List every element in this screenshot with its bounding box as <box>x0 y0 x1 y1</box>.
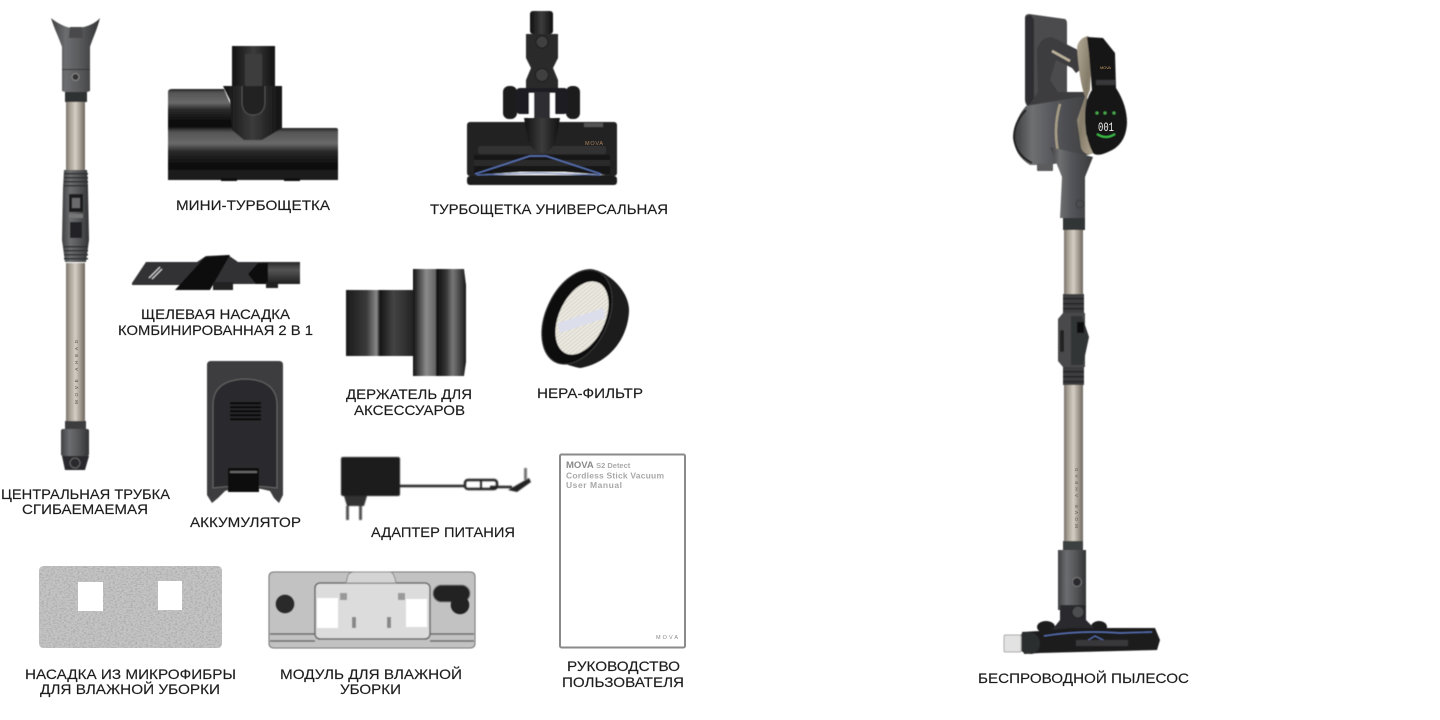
icon: wet cleaning module <box>269 572 475 648</box>
icon: user manual: User Manual <box>566 480 622 490</box>
icon: HEPA filter <box>528 259 629 375</box>
label: microfiber pad: ДЛЯ ВЛАЖНОЙ УБОРКИ <box>40 680 220 697</box>
label: crevice tool: ЩЕЛЕВАЯ НАСАДКА <box>141 306 291 322</box>
icon: power adapter <box>341 457 531 520</box>
label: battery: АККУМУЛЯТОР <box>190 514 301 530</box>
label: cordless vacuum: БЕСПРОВОДНОЙ ПЫЛЕСОС <box>978 669 1189 686</box>
label: accessory holder: ДЕРЖАТЕЛЬ ДЛЯ <box>346 386 472 402</box>
label: mini turbo brush: МИНИ-ТУРБОЩЕТКА <box>176 197 331 213</box>
label: user manual: РУКОВОДСТВО <box>567 658 680 674</box>
text: vacuum logo: MOVA <box>1100 65 1111 70</box>
label: wet cleaning module: МОДУЛЬ ДЛЯ ВЛАЖНОЙ <box>280 665 462 682</box>
icon: universal turbo brush <box>467 11 617 185</box>
icon: microfiber pad <box>39 566 222 648</box>
upper tube <box>1064 230 1083 295</box>
label: accessory holder: АКСЕССУАРОВ <box>354 402 465 418</box>
label: crevice tool <box>118 306 313 338</box>
illustration: cordless vacuum <box>1004 14 1160 654</box>
black panel and display <box>1085 37 1127 155</box>
icon: mini turbo brush <box>168 46 338 181</box>
label: HEPA filter: НЕРА-ФИЛЬТР <box>537 385 643 401</box>
label: user manual <box>562 658 684 690</box>
icon: accessory holder <box>346 269 466 376</box>
text: manual cover: MOVA S2 Detect <box>566 460 631 471</box>
text: display digits: 001 <box>1098 120 1114 135</box>
lower section <box>1063 541 1083 550</box>
label: wet cleaning module <box>280 665 462 697</box>
label: crevice tool: КОМБИНИРОВАННАЯ 2 В 1 <box>118 322 313 338</box>
label: central tube: СГИБАЕМАЕМАЯ <box>22 501 148 517</box>
text: brush logo: MOVA <box>585 141 603 147</box>
label: microfiber pad <box>25 666 236 697</box>
label: accessory holder <box>346 386 472 418</box>
panel: central bendable tube <box>51 18 100 470</box>
gold shell <box>1077 36 1094 154</box>
icon: user manual: Cordless Stick Vacuum <box>566 470 664 480</box>
neck <box>1050 147 1093 218</box>
icon: central tube <box>51 18 100 470</box>
handle <box>1030 37 1088 110</box>
label: microfiber pad: НАСАДКА ИЗ МИКРОФИБРЫ <box>25 666 236 682</box>
label: central tube <box>1 486 171 517</box>
bin and motor <box>1014 96 1096 165</box>
text: tube lettering: MOVE AHEAD <box>74 339 79 404</box>
floor head <box>1022 628 1160 654</box>
label: central tube: ЦЕНТРАЛЬНАЯ ТРУБКА <box>1 486 171 502</box>
icon: battery <box>207 361 283 503</box>
lower tube <box>1064 385 1083 541</box>
icon: crevice tool <box>132 255 300 290</box>
icon: user manual <box>560 454 685 648</box>
label: universal turbo brush: ТУРБОЩЕТКА УНИВЕРСАЛЬНАЯ <box>430 201 668 217</box>
joint <box>1063 294 1084 385</box>
label: power adapter: АДАПТЕР ПИТАНИЯ <box>371 524 515 540</box>
icon: user manual: MOVA <box>656 635 678 641</box>
label: wet cleaning module: УБОРКИ <box>340 681 401 697</box>
label: user manual: ПОЛЬЗОВАТЕЛЯ <box>562 674 684 690</box>
wall bracket <box>1025 14 1067 107</box>
text: lower tube lettering: MOVE AHEAD <box>1074 467 1079 528</box>
